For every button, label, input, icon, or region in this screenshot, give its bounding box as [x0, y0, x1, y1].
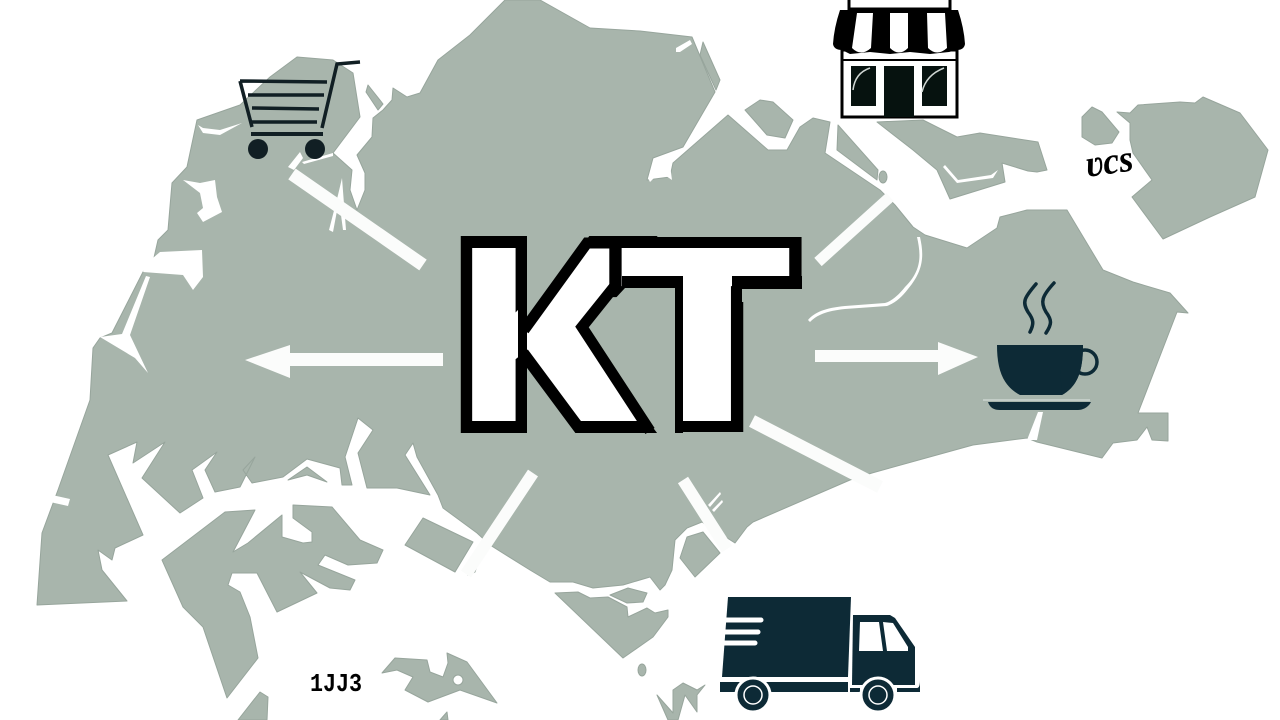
store body	[842, 50, 957, 117]
line to store	[818, 197, 890, 262]
K inner edge line	[582, 282, 650, 431]
bottom left sliver	[238, 692, 268, 720]
letter T: T	[625, 203, 785, 465]
store door	[884, 66, 914, 117]
triangular islet	[837, 125, 878, 180]
line lower right	[752, 421, 880, 487]
icon: delivery truck	[720, 597, 920, 712]
arrow: left	[245, 345, 443, 378]
connector lines and arrows	[245, 174, 978, 574]
store sign	[849, 0, 950, 9]
K upper notch trim	[527, 235, 590, 322]
small southern island	[382, 653, 497, 703]
line lower left	[466, 473, 533, 574]
store awning	[833, 10, 965, 54]
T stem left trim	[665, 288, 675, 434]
label: garbled number: 1JJ3	[310, 669, 362, 699]
store windows	[851, 66, 876, 106]
bottom islet tip	[440, 712, 448, 720]
saucer	[988, 402, 1091, 410]
small east islet	[1082, 107, 1119, 145]
small bottom specks	[657, 683, 705, 720]
awning base line	[842, 59, 956, 61]
T crossbar trim	[622, 276, 802, 289]
south islet	[405, 518, 473, 572]
white river channels	[50, 40, 1043, 512]
steam	[1025, 283, 1054, 333]
river sliver west	[366, 85, 383, 110]
southern shore islet	[555, 592, 668, 658]
line to cart	[292, 174, 423, 265]
Pulau Tekong shape	[1117, 97, 1268, 239]
saucer highlight	[983, 399, 1090, 401]
truck cargo box	[722, 597, 851, 677]
letter K: K	[463, 204, 624, 465]
south sliver	[468, 557, 480, 575]
KT logo	[463, 203, 804, 465]
main island landmass	[37, 0, 1188, 605]
southwest island	[162, 505, 383, 698]
truck cab	[852, 615, 915, 685]
letter T: T	[625, 203, 785, 465]
T stem left edge	[675, 288, 683, 433]
cup	[997, 345, 1083, 395]
truck base	[720, 682, 848, 692]
K arm edge	[524, 243, 625, 330]
letter K: K	[463, 204, 624, 465]
icon: shopping cart	[240, 62, 360, 159]
T background trim	[612, 288, 804, 302]
K arm and leg fill	[529, 248, 638, 421]
icon: storefront	[833, 0, 965, 117]
arrow: right to cup	[815, 342, 978, 375]
southeast islet by line	[680, 532, 720, 577]
small oval islet	[610, 588, 647, 603]
truck wheels	[736, 678, 770, 712]
north islet	[745, 100, 793, 138]
scribble mark near east island: ʋcs	[1082, 138, 1136, 186]
icon: coffee cup	[983, 283, 1097, 410]
K stem separator	[518, 238, 527, 433]
line lower centre	[683, 480, 727, 549]
river sliver north	[700, 42, 720, 90]
Pulau Ubin shape	[877, 120, 1047, 199]
arc islet on south coast	[288, 467, 327, 482]
